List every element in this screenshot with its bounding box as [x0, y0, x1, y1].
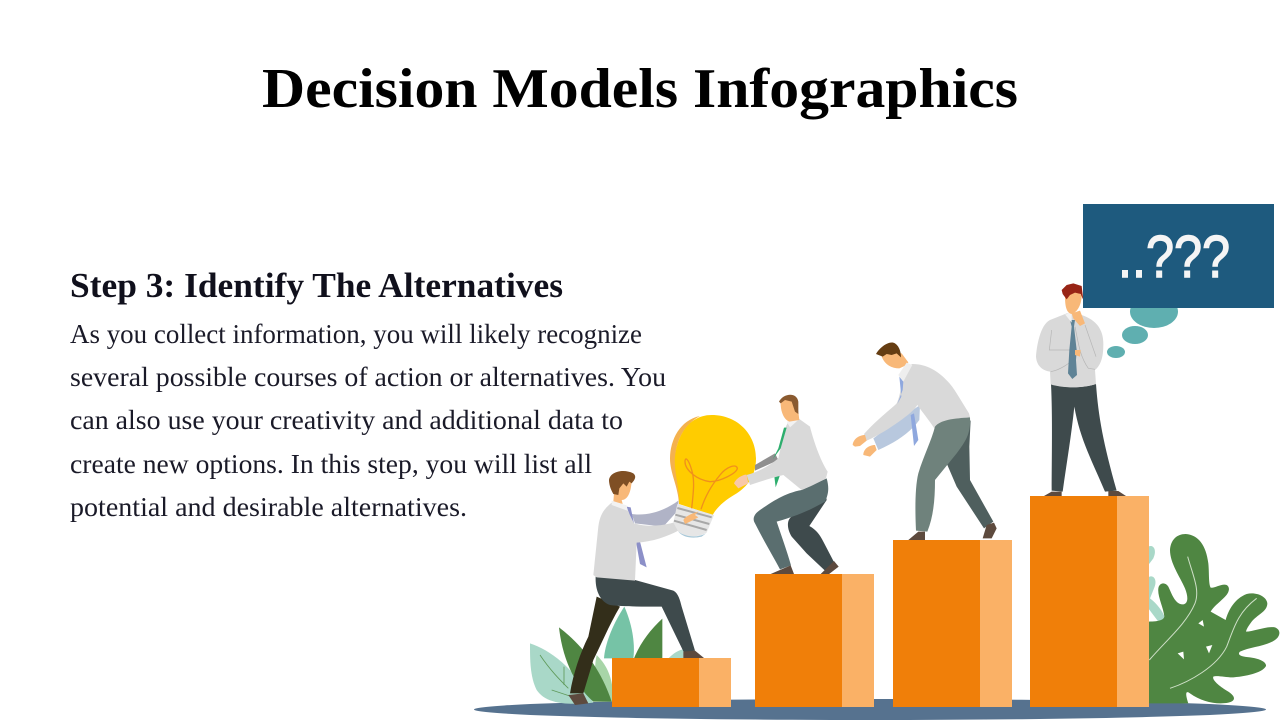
heading: step 3: Step 3: Identify The Alternatives: [70, 267, 563, 305]
figure: crouching man: [734, 395, 839, 575]
bar 1: [612, 658, 731, 707]
body text: [70, 319, 667, 522]
body text: create new options. In this step, you will list all: [70, 449, 592, 479]
body text: potential and desirable alternatives.: [70, 492, 467, 522]
bar 4: [1030, 496, 1149, 707]
figure: thinking man: [1036, 283, 1126, 496]
text block: step 3: [70, 267, 667, 522]
figure: man holding bulb: [568, 471, 704, 705]
bar 2: [755, 574, 874, 707]
body text: several possible courses of action or alternatives. You: [70, 362, 667, 392]
speech box: [1083, 204, 1274, 308]
plant: left leaves: [530, 607, 683, 704]
bar 3: [893, 540, 1012, 707]
thought bubbles: [1107, 295, 1178, 358]
title: Decision Models Infographics: [262, 58, 1018, 120]
speech box: ..???: [1118, 224, 1230, 290]
body text: As you collect information, you will likely recognize: [70, 319, 642, 349]
body text: can also use your creativity and additional data to: [70, 405, 623, 435]
ground shadow ellipse: [474, 699, 1266, 720]
figure: man reaching down: [853, 342, 997, 540]
icon: light bulb: [670, 415, 756, 538]
plant: right leaf: [1143, 534, 1279, 703]
